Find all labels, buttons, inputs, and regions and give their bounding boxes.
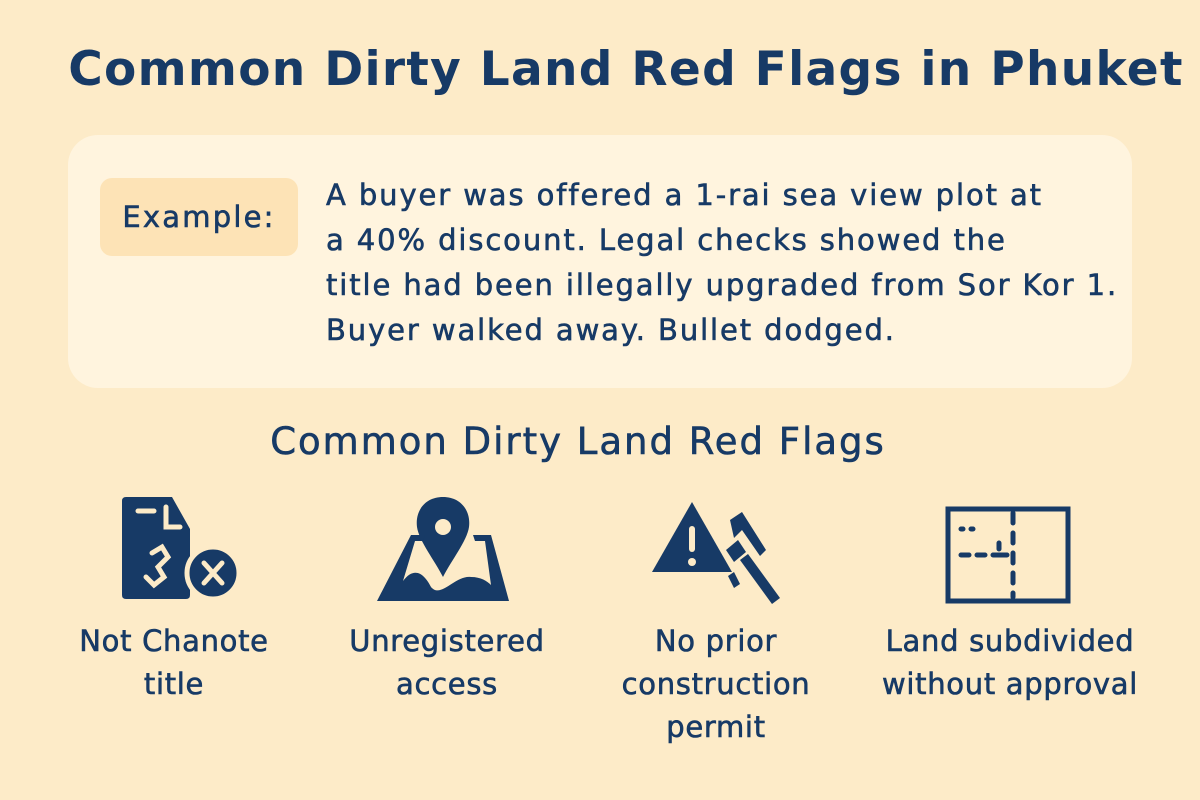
label: no permit: No prior [655, 624, 777, 658]
label: no permit: construction [622, 667, 810, 701]
label: no permit: permit [666, 710, 766, 744]
label: subdivided: without approval [882, 667, 1138, 701]
example text: title had been illegally upgraded from Sor Kor 1. [326, 268, 1118, 302]
label: subdivided [882, 624, 1138, 701]
example text [326, 178, 1118, 347]
label: unregistered access [349, 624, 545, 701]
label: not chanote [79, 624, 269, 701]
label: not chanote: Not Chanote [79, 624, 269, 658]
example label pill [100, 178, 298, 256]
icon: warning with hammer [652, 502, 780, 604]
icon: document with x [122, 497, 236, 599]
icon: map pin [377, 497, 509, 601]
example label pill: Example: [122, 200, 276, 234]
icon: subdivided plot [946, 506, 1070, 604]
label: not chanote: title [144, 667, 204, 701]
panel: example [68, 135, 1132, 388]
example text: A buyer was offered a 1-rai sea view plot at [326, 178, 1043, 212]
title: Common Dirty Land Red Flags in Phuket [68, 42, 1184, 97]
label: subdivided: Land subdivided [886, 624, 1134, 658]
example text: a 40% discount. Legal checks showed the [326, 223, 1007, 257]
subtitle: Common Dirty Land Red Flags [270, 420, 886, 463]
label: unregistered access: access [396, 667, 498, 701]
label: no permit [622, 624, 810, 744]
label: unregistered access: Unregistered [349, 624, 545, 658]
example text: Buyer walked away. Bullet dodged. [326, 313, 896, 347]
